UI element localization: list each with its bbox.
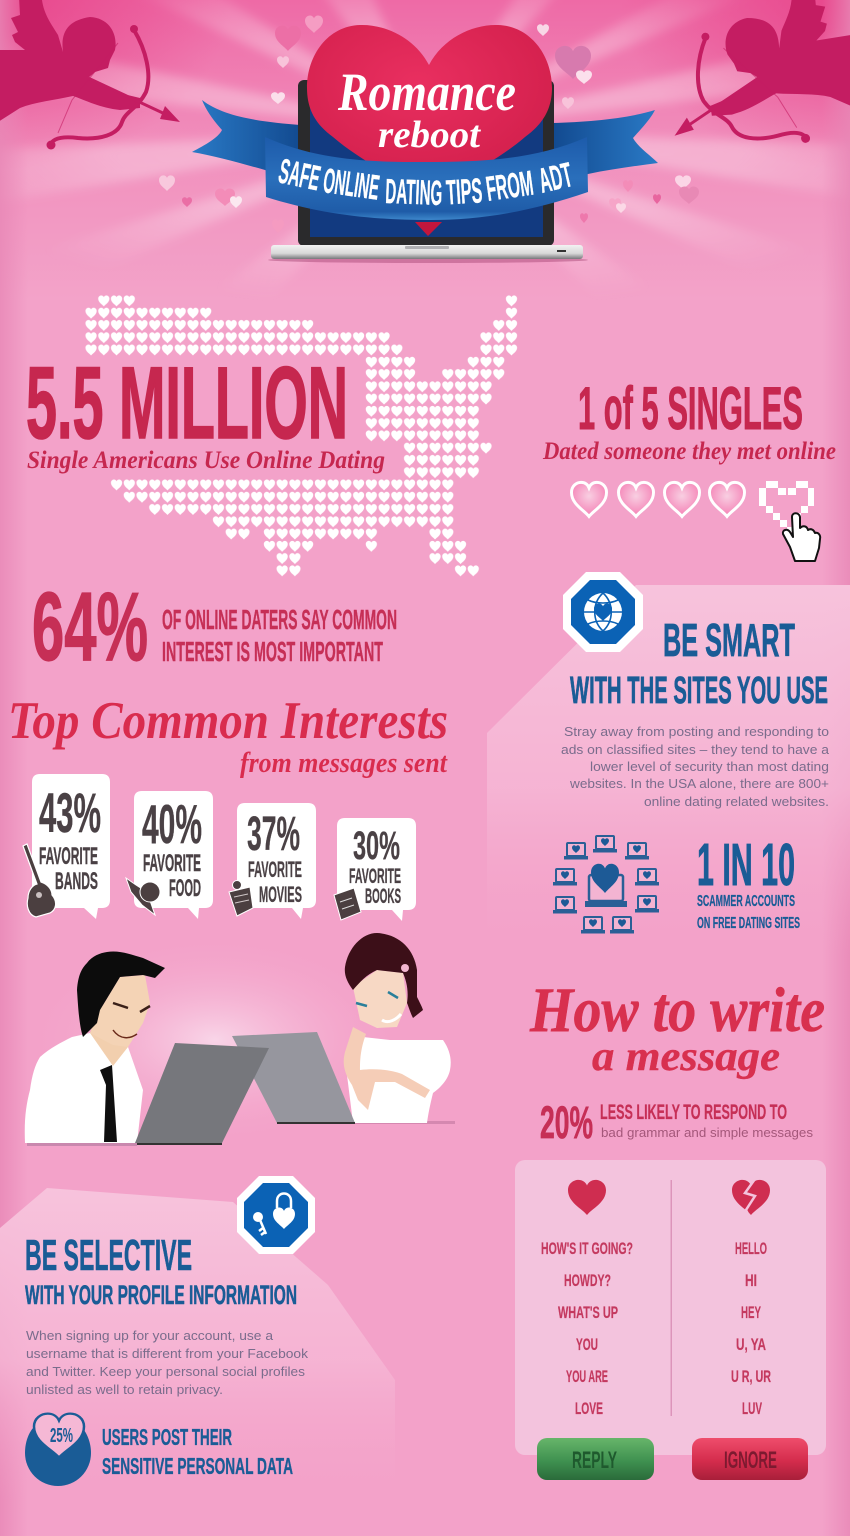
icon: guitar: [23, 844, 56, 917]
list: replies: YOU ARE: [566, 1367, 608, 1386]
paragraph: username that is different from your Facebook: [26, 1347, 309, 1361]
badge: globe: [563, 572, 643, 652]
stat: users post: SENSITIVE PERSONAL DATA: [102, 1453, 293, 1479]
bubble: favorite bands: 43%: [39, 781, 101, 844]
list: ignored: U, YA: [736, 1335, 766, 1354]
bubble: favorite movies: 37%: [247, 808, 300, 861]
ribbon text: ONLINE: [321, 161, 382, 208]
woman: [344, 933, 451, 1123]
heading: BE SELECTIVE: [25, 1231, 192, 1280]
stat: 5.5 million: 5.5 MILLION: [26, 346, 348, 460]
stat: 64 percent: [32, 572, 397, 681]
icon: 25 percent heart: [25, 1414, 91, 1486]
stat: 64 percent: 64%: [32, 572, 148, 681]
panel: message examples: [515, 1160, 826, 1455]
heading: how to write a message: [529, 974, 825, 1080]
heading: WITH YOUR PROFILE INFORMATION: [25, 1280, 297, 1310]
panel: be selective: [0, 1176, 395, 1500]
bubble: favorite food: 40%: [142, 793, 202, 855]
list: ignored: LUV: [742, 1399, 762, 1418]
stat: users post: [102, 1424, 293, 1479]
stat: 20 percent: bad grammar and simple messages: [601, 1125, 814, 1140]
cupid left: [0, 0, 180, 150]
floating hearts: [159, 15, 699, 233]
paragraph: When signing up for your account, use a: [26, 1329, 273, 1343]
ribbon text: [275, 152, 576, 213]
title text: Romance: [337, 62, 516, 122]
stat: 20 percent: 20%: [540, 1097, 593, 1148]
stat: 1 of 5 singles: [542, 375, 836, 561]
laptop base: [268, 245, 588, 263]
icon: vegetables: [126, 878, 160, 915]
heart map of USA: [85, 295, 518, 577]
paragraph: [26, 1329, 309, 1397]
bubble: favorite bands: BANDS: [55, 868, 98, 895]
heading: top common interests: from messages sent: [240, 747, 448, 779]
list: replies: HOW'S IT GOING?: [541, 1239, 633, 1258]
heading: [570, 614, 828, 712]
list: ignored: HEY: [741, 1303, 761, 1322]
button: ignore: [692, 1438, 808, 1480]
heading: top common interests: Top Common Interests: [8, 692, 448, 750]
bubble: favorite books: FAVORITE: [349, 865, 401, 888]
cupid right: [649, 0, 850, 163]
bubble: favorite books: [334, 818, 416, 921]
bubble: favorite food: FAVORITE: [143, 850, 201, 877]
paragraph: ads on classified sites – they tend to have a: [561, 743, 829, 757]
bubble: favorite food: FOOD: [169, 875, 201, 902]
ribbon text: FROM: [484, 164, 536, 209]
paragraph: online dating related websites.: [644, 795, 829, 809]
stat: 1 in 10: [697, 832, 800, 932]
big heart: [307, 25, 552, 190]
icon: laptop network: [553, 836, 659, 934]
paragraph: [561, 725, 829, 809]
man: [25, 952, 165, 1143]
stat: 20 percent: [540, 1097, 814, 1148]
stat: 64 percent: INTEREST IS MOST IMPORTANT: [162, 636, 383, 667]
bubble: favorite bands: FAVORITE: [39, 843, 98, 870]
hand cursor: [783, 513, 820, 561]
icon: broken heart: [732, 1179, 770, 1216]
text: OF ONLINE DATERS SAY COMMON: [162, 604, 397, 635]
list: ignored: HELLO: [735, 1239, 767, 1258]
ribbon text: DATING: [385, 172, 443, 213]
list: replies: WHAT'S UP: [558, 1303, 618, 1322]
heading: top common interests: [8, 692, 448, 779]
laptop front: [135, 1043, 269, 1143]
stat: 5.5 million: [26, 346, 385, 474]
button: reply: [537, 1438, 654, 1480]
icon: books: [334, 888, 361, 920]
pixel heart: [759, 481, 814, 532]
button: ignore: IGNORE: [724, 1447, 777, 1474]
ribbon front: [265, 137, 588, 220]
laptop back: [232, 1032, 355, 1123]
bubble: favorite bands: [23, 774, 110, 919]
laptop screen: [298, 80, 554, 246]
list: ignored: HI: [745, 1271, 757, 1290]
list: ignored: U R, UR: [731, 1367, 771, 1386]
laptop and title: [192, 25, 658, 263]
stat: 5.5 million: Single Americans Use Online Dating: [27, 447, 385, 474]
bubble: favorite movies: MOVIES: [259, 882, 302, 907]
paragraph: websites. In the USA alone, there are 800+: [569, 777, 829, 791]
button: reply: REPLY: [572, 1447, 617, 1474]
ribbon tails: [192, 100, 658, 186]
stat: users post: USERS POST THEIR: [102, 1424, 232, 1450]
bubble: favorite movies: [229, 803, 316, 919]
paragraph: and Twitter. Keep your personal social profiles: [26, 1365, 305, 1379]
illustration: couple on laptops: [25, 933, 455, 1146]
title text: reboot: [378, 114, 481, 156]
ribbon text: TIPS: [445, 171, 483, 212]
ribbon text: SAFE: [275, 152, 324, 198]
ribbon text: ADT: [535, 155, 576, 201]
bubble: favorite books: 30%: [353, 824, 400, 868]
list: replies: [541, 1239, 633, 1418]
list: replies: LOVE: [575, 1399, 603, 1418]
heading: how to write a message: a message: [592, 1034, 780, 1080]
bubble: favorite food: [126, 791, 213, 919]
paragraph: unlisted as well to retain privacy.: [26, 1383, 223, 1397]
heart row: [572, 482, 744, 516]
list: ignored: [731, 1239, 771, 1418]
list: replies: YOU: [576, 1335, 598, 1354]
badge: lock and key: [237, 1176, 315, 1254]
panel: be smart: [487, 572, 850, 955]
title text: [337, 62, 516, 156]
icon: 25 percent heart: 25%: [50, 1425, 73, 1447]
bubble: favorite books: BOOKS: [365, 885, 401, 908]
bubble: favorite movies: FAVORITE: [248, 857, 302, 882]
heading: [25, 1231, 297, 1310]
paragraph: Stray away from posting and responding to: [564, 725, 829, 739]
icon: heart: [568, 1180, 606, 1215]
icon: popcorn: [229, 880, 253, 916]
list: replies: HOWDY?: [564, 1271, 611, 1290]
paragraph: lower level of security than most dating: [590, 760, 829, 774]
